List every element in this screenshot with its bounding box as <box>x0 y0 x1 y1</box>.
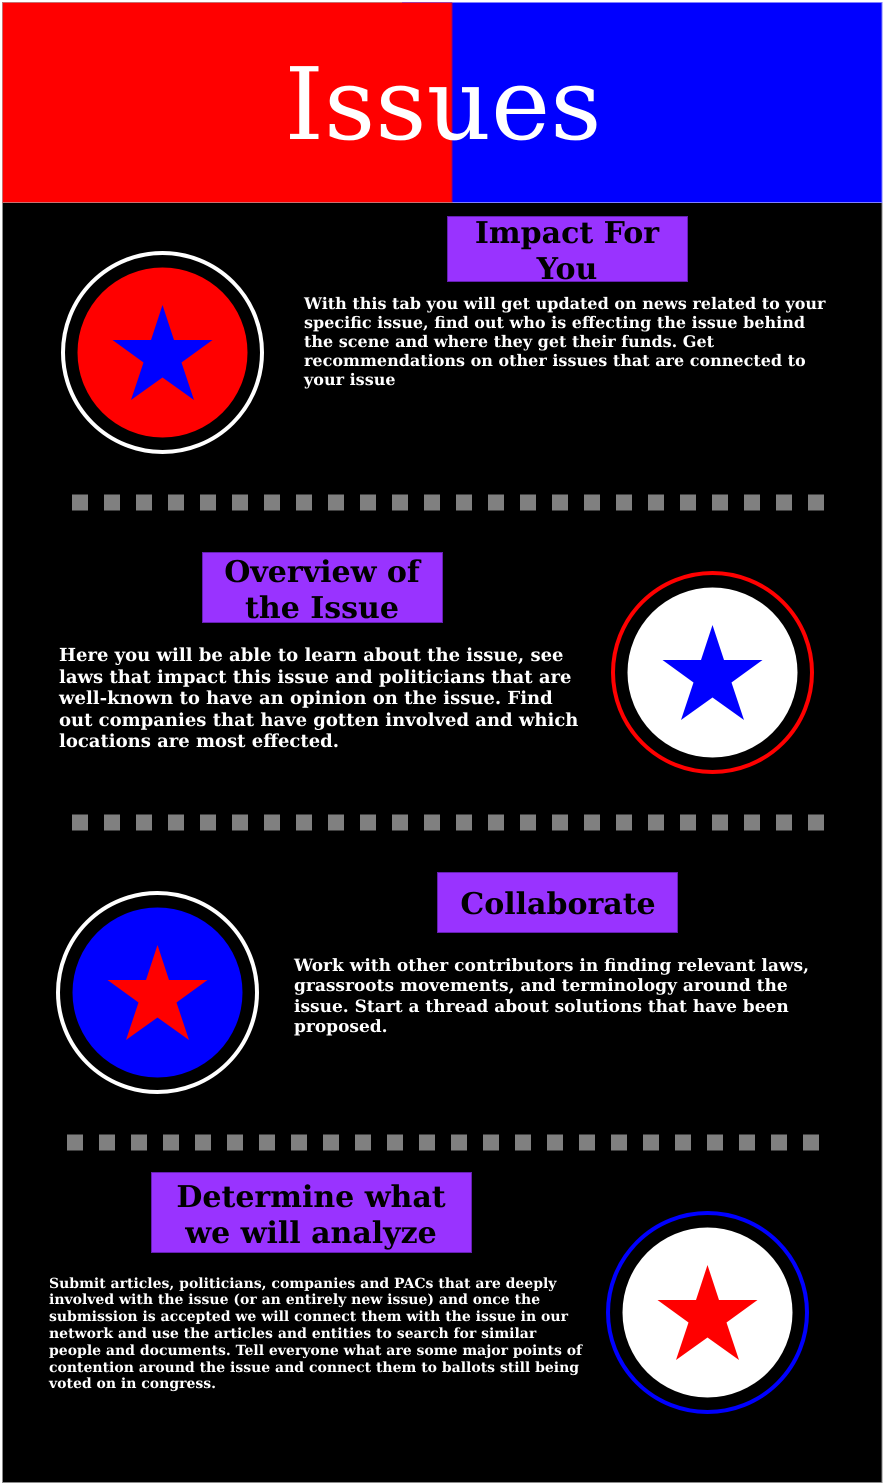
text: Determine description: people and documents. Tell everyone what are some major points of <box>49 1343 582 1359</box>
text: Overview description: well-known to have an opinion on the issue. Find <box>59 688 553 709</box>
heading: Impact For You: You <box>537 252 597 287</box>
heading: Determine what we will analyze: Determine what <box>176 1180 446 1215</box>
text: Determine description: involved with the issue (or an entirely new issue) and once the <box>49 1292 540 1308</box>
divider 1 <box>72 494 832 510</box>
text: Determine description: contention around the issue and connect them to ballots still being <box>49 1360 579 1376</box>
heading: Overview of the Issue: the Issue <box>245 591 399 626</box>
heading box: Collaborate <box>438 872 678 932</box>
text: Impact For You description: specific issue, find out who is effecting the issue behind <box>304 313 805 332</box>
text: Determine description <box>48 1276 583 1392</box>
text: Determine description: network and use the articles and entities to search for similar <box>49 1326 536 1342</box>
text: Determine description: Submit articles, politicians, companies and PACs that are deeply <box>49 1276 556 1292</box>
text: Collaborate description: issue. Start a thread about solutions that have been <box>294 997 789 1017</box>
text: Impact For You description: recommendations on other issues that are connected to <box>304 351 806 370</box>
text: Overview description: locations are most effected. <box>59 731 339 752</box>
text: Impact For You description: the scene and where they get their funds. Get <box>304 332 714 351</box>
icon: star badge 2 <box>613 573 812 772</box>
text: Impact For You description: With this tab you will get updated on news related to your <box>304 294 825 313</box>
heading box: Determine what we will analyze <box>152 1172 472 1252</box>
heading: Impact For You: Impact For <box>475 216 659 251</box>
divider 2 <box>72 814 832 830</box>
text: Overview description: laws that impact this issue and politicians that are <box>59 667 571 688</box>
heading box: Impact For You <box>448 216 688 282</box>
icon: star badge 1 <box>63 253 262 452</box>
text: Collaborate description: grassroots movements, and terminology around the <box>294 976 788 996</box>
text: Collaborate description: Work with other contributors in finding relevant laws, <box>294 956 809 976</box>
heading: Determine what we will analyze <box>176 1180 446 1251</box>
text: Overview description <box>58 645 578 752</box>
heading: Collaborate: Collaborate <box>460 887 656 922</box>
heading: Overview of the Issue: Overview of <box>224 555 420 590</box>
title: Issues <box>284 46 602 163</box>
red header band <box>2 2 452 202</box>
text: Determine description: voted on in congress. <box>49 1376 216 1392</box>
text: Overview description: Here you will be able to learn about the issue, see <box>59 645 564 666</box>
blue header band <box>402 2 882 202</box>
text: Determine description: submission is accepted we will connect them with the issue in our <box>49 1309 568 1325</box>
heading: Determine what we will analyze: we will analyze <box>185 1216 437 1251</box>
heading: Overview of the Issue <box>224 555 422 626</box>
heading box: Overview of the Issue <box>202 552 442 622</box>
divider 3 <box>67 1134 827 1150</box>
text: Collaborate description <box>294 956 809 1037</box>
text: Overview description: out companies that have gotten involved and which <box>59 710 578 731</box>
heading: Impact For You <box>475 216 660 287</box>
text: Impact For You description <box>304 294 826 389</box>
icon: star badge 4 <box>608 1213 807 1412</box>
text: Collaborate description: proposed. <box>294 1017 388 1037</box>
icon: star badge 3 <box>58 893 257 1092</box>
text: Impact For You description: your issue <box>304 370 396 389</box>
